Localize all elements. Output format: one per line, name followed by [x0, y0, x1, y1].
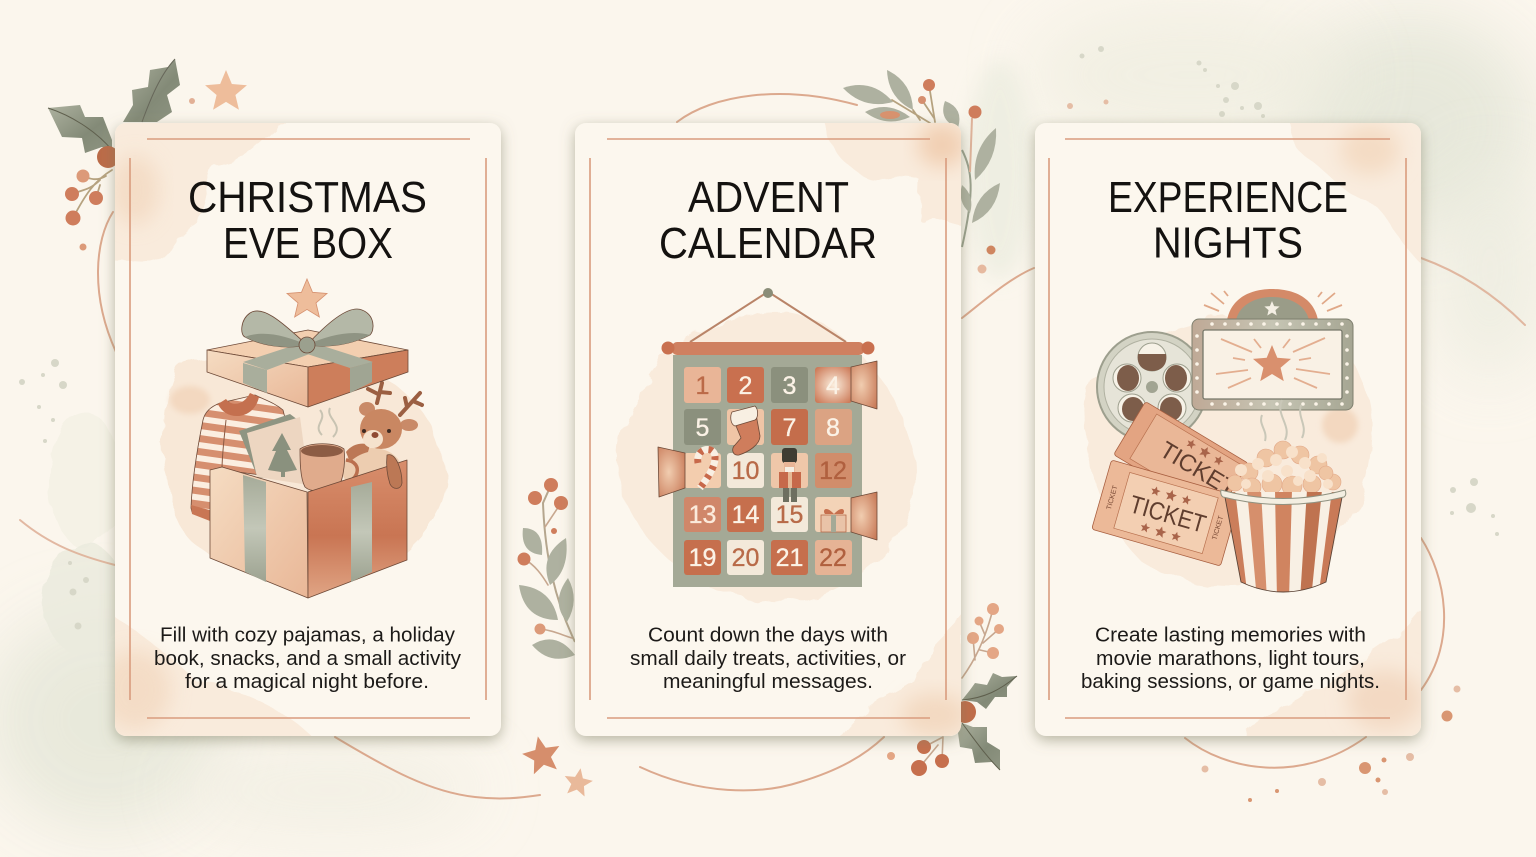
description text: baking sessions, or game nights.: [1081, 670, 1380, 693]
calendar number tiles: 2: [739, 372, 752, 400]
description text: movie marathons, light tours,: [1096, 647, 1365, 670]
description text: meaningful messages.: [663, 670, 873, 693]
icon: steam: [1261, 400, 1304, 441]
icon: back ticket: [1114, 402, 1250, 518]
icon: small gift: [821, 509, 846, 532]
calendar number tiles: 10: [732, 457, 759, 485]
icon: popcorn: [1227, 441, 1341, 496]
icon: stars at bottom: [519, 732, 595, 797]
icon: open door 16: [851, 492, 877, 540]
calendar number tiles: 21: [776, 544, 803, 572]
panel: Advent Calendar: [575, 115, 969, 745]
icon: gift box base: [210, 460, 407, 598]
calendar number tiles: 13: [689, 501, 716, 529]
illustration: cinema night: [1084, 289, 1372, 600]
icon: open door 4: [851, 361, 877, 409]
calendar number tiles: 8: [826, 414, 840, 442]
calendar number tiles: [684, 367, 852, 575]
icon: front ticket: TICKET: [1126, 490, 1209, 539]
icon: mug with steam: [300, 408, 357, 491]
icon: front ticket: TICKET: [1106, 484, 1120, 511]
calendar number tiles: 3: [783, 372, 796, 400]
icon: open door 9: [658, 447, 685, 497]
icon: leaf sprig top center: [843, 70, 1000, 274]
description text: for a magical night before.: [185, 670, 429, 693]
icon: book: [239, 414, 309, 485]
icon: stocking: [731, 406, 760, 455]
icon: film reel: [1097, 332, 1207, 442]
calendar banner: [673, 355, 862, 587]
icon: reindeer plush head and arm: [346, 383, 422, 488]
icon: candy cane: [698, 449, 715, 488]
icon: striped popcorn bucket: [1221, 490, 1346, 600]
calendar number tiles: 19: [689, 544, 716, 572]
description text: Fill with cozy pajamas, a holiday: [160, 624, 456, 646]
icon: back ticket: TICKET: [1155, 437, 1241, 503]
icon: marquee arch: [1227, 289, 1318, 320]
icon: nutcracker: [779, 448, 801, 502]
heading: EVE BOX: [223, 220, 393, 268]
calendar number tiles: 7: [783, 414, 796, 442]
illustration: open gift box: [164, 279, 445, 598]
icon: front ticket: TICKET: [1212, 514, 1225, 541]
description text: small daily treats, activities, or: [630, 647, 906, 670]
calendar number tiles: 15: [776, 501, 803, 529]
calendar number tiles: 4: [826, 372, 840, 400]
icon: reindeer plush body: [342, 448, 402, 492]
icon: marquee sign: [1192, 291, 1353, 410]
calendar number tiles: 22: [819, 544, 847, 572]
icon: star: [287, 279, 327, 317]
description text: book, snacks, and a small activity: [154, 647, 462, 670]
icon: holly and berries lower right of calendar: [887, 603, 1017, 776]
calendar number tiles: 14: [732, 501, 759, 529]
calendar number tiles: 12: [819, 457, 847, 485]
panel: Experience Nights: [1035, 115, 1430, 745]
heading: CHRISTMAS: [188, 174, 427, 222]
panel: Christmas Eve Box: [99, 115, 501, 745]
calendar number tiles: 5: [696, 414, 709, 442]
icon: berry sprig lower left of calendar: [518, 478, 575, 659]
heading: EXPERIENCE: [1108, 174, 1348, 222]
heading: NIGHTS: [1153, 220, 1303, 268]
description text: Create lasting memories with: [1095, 624, 1366, 646]
icon: sweater: [191, 393, 300, 521]
description text: Count down the days with: [648, 624, 888, 646]
icon: hanging strings and rod: [662, 288, 874, 355]
icon: gift lid with bow: [207, 309, 408, 407]
icon: front ticket: [1092, 460, 1240, 566]
heading: CALENDAR: [659, 220, 877, 268]
calendar number tiles: 1: [696, 372, 709, 400]
heading: ADVENT: [688, 174, 849, 222]
icon: holly and berries top left: [48, 59, 247, 250]
illustration: hanging advent calendar: [620, 288, 915, 601]
calendar number tiles: 20: [732, 544, 759, 572]
